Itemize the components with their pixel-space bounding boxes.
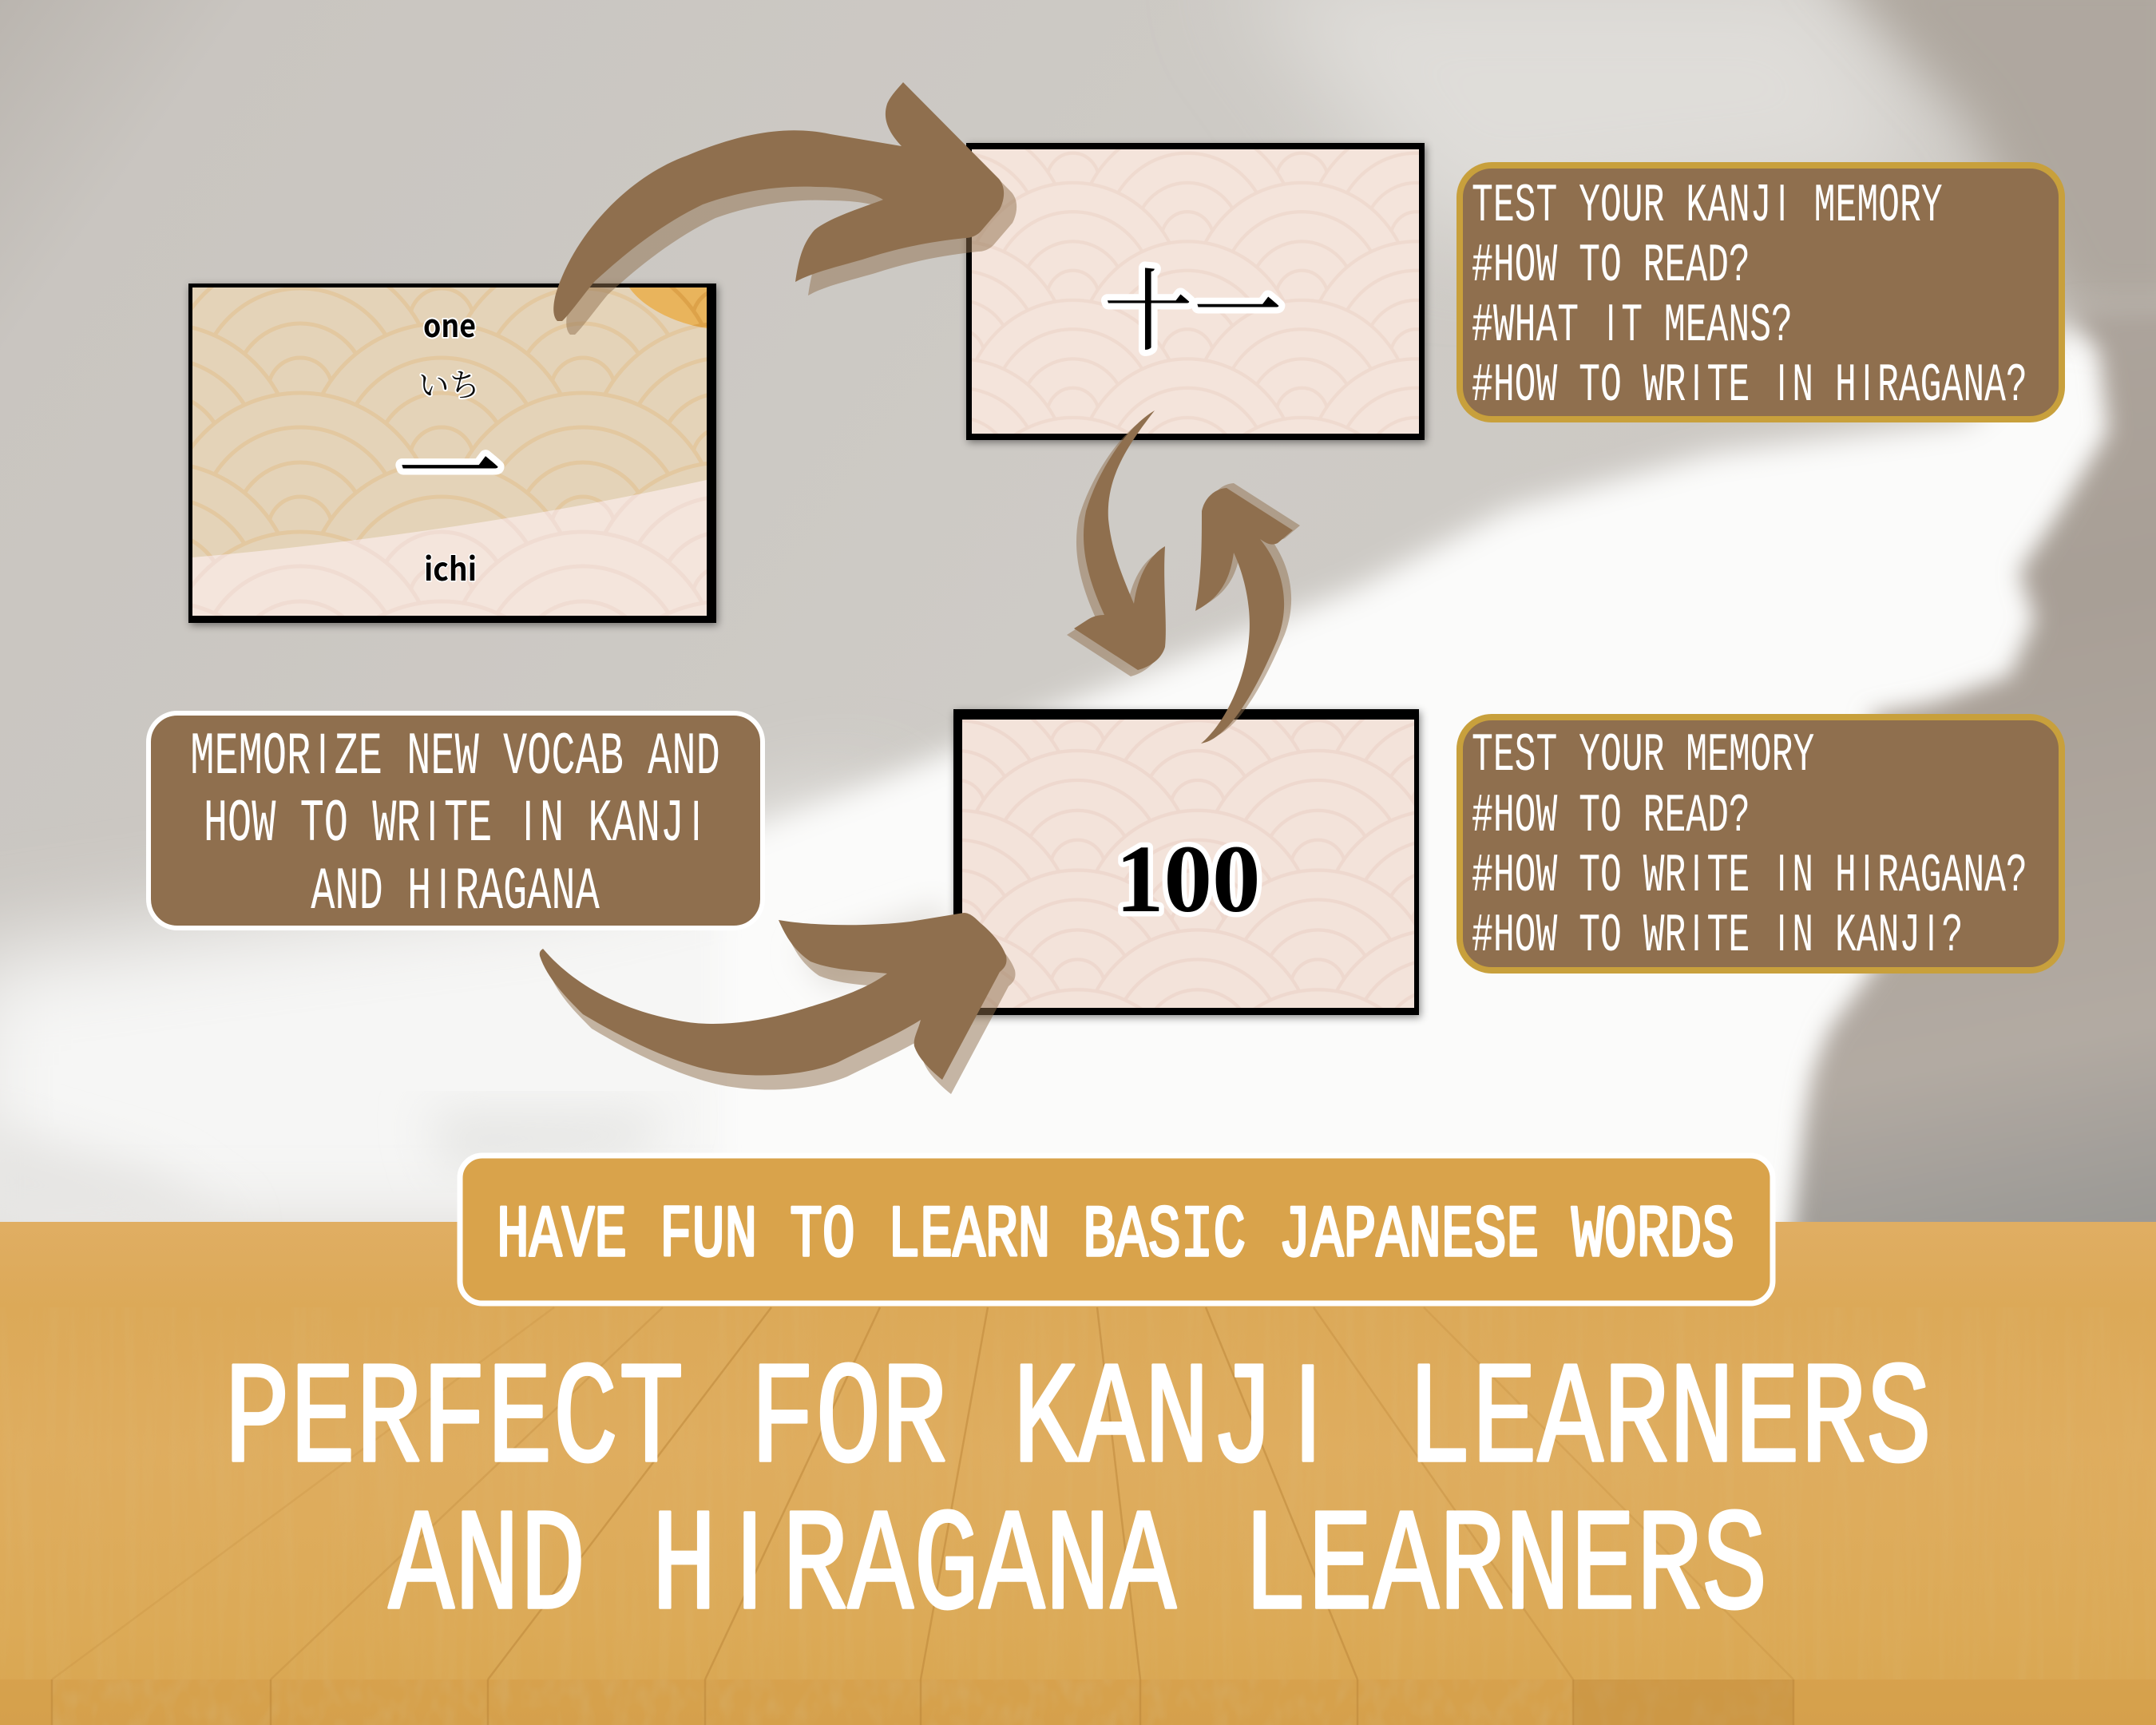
background: wall with window light	[0, 0, 2156, 1246]
card: kanji one flashcard	[188, 284, 716, 623]
callout: test your kanji memory: #HOW TO WRITE IN HIRAGANA?	[1472, 354, 2027, 417]
callout: memorize new vocab: MEMORIZE NEW VOCAB AND	[190, 721, 720, 791]
title: perfect for kanji and hiragana learners: PERFECT FOR KANJI LEARNERS	[224, 1336, 1932, 1505]
floor: wooden table top	[0, 1222, 2156, 1725]
romaji reading: ichi	[424, 544, 477, 590]
callout: test your memory: TEST YOUR MEMORY	[1472, 725, 1814, 787]
english word: one	[423, 302, 476, 347]
callout: test your kanji memory: #WHAT IT MEANS?	[1472, 294, 1793, 357]
callout: memorize new vocab: HOW TO WRITE IN KANJI	[204, 788, 701, 859]
arrow: first card to eleven card	[553, 82, 1017, 335]
banner: have fun: HAVE FUN TO LEARN BASIC JAPANESE WORDS	[497, 1196, 1734, 1278]
arrow: eleven card down to 100 card	[1067, 410, 1166, 676]
kanji eleven: 十一	[1104, 240, 1282, 369]
callout: memorize new vocab: AND HIRAGANA	[311, 856, 600, 926]
title: perfect for kanji and hiragana learners: AND HIRAGANA LEARNERS	[389, 1483, 1767, 1652]
number 100: 100	[1116, 826, 1260, 933]
callout: test your memory	[1460, 717, 2062, 970]
callout: memorize new vocab	[149, 713, 763, 928]
arrow: 100 card up to eleven card	[1195, 483, 1300, 744]
callout: test your memory: #HOW TO READ?	[1472, 786, 1750, 847]
title: perfect for kanji and hiragana learners	[224, 1336, 1932, 1652]
arrow: memorize box to 100 card	[540, 913, 1016, 1094]
kanji one: 一	[397, 389, 502, 541]
card: kanji eleven flashcard	[966, 143, 1425, 440]
callout: test your kanji memory: TEST YOUR KANJI MEMORY	[1472, 174, 1943, 237]
callout: test your kanji memory	[1460, 165, 2062, 419]
card: number 100 flashcard	[953, 709, 1419, 1015]
callout: test your kanji memory: #HOW TO READ?	[1472, 236, 1750, 297]
hiragana reading: いち	[418, 360, 480, 406]
callout: test your memory: #HOW TO WRITE IN HIRAGANA?	[1472, 844, 2027, 907]
callout: test your memory: #HOW TO WRITE IN KANJI?	[1472, 904, 1963, 967]
banner: have fun	[460, 1156, 1773, 1303]
